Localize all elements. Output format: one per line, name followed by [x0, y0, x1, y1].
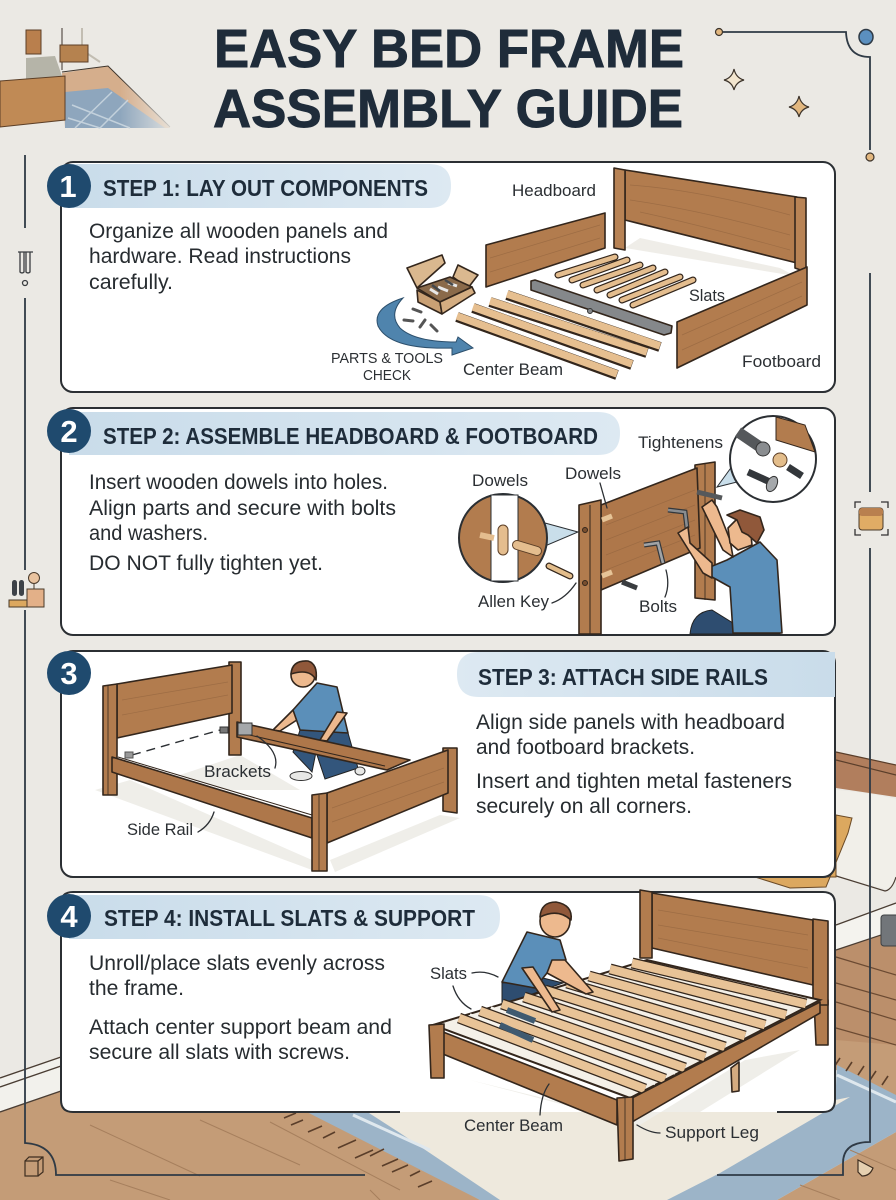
- illustration: bed headboard: [640, 890, 828, 1045]
- text block: step 2 instructions: and washers.: [89, 522, 208, 545]
- panel: step 1: [47, 162, 835, 392]
- icon: bolts and dowel: [549, 492, 722, 588]
- heading: step 1: [47, 164, 451, 208]
- text block: step 3 instructions: securely on all corners.: [476, 795, 692, 818]
- text block: step 2 instructions: DO NOT fully tighten yet.: [89, 552, 323, 575]
- labels: step 3: Side Rail: [127, 820, 193, 839]
- labels: step 1: [331, 181, 821, 384]
- heading: step 3: STEP 3: ATTACH SIDE RAILS: [478, 664, 768, 690]
- heading: step 4: STEP 4: INSTALL SLATS & SUPPORT: [104, 905, 475, 931]
- heading: step 2: 2: [60, 414, 78, 449]
- icon: left shelf: [9, 572, 44, 607]
- text block: step 1 instructions: [89, 220, 388, 294]
- illustration: floor shadow: [95, 755, 460, 872]
- heading: step 4: [47, 894, 500, 939]
- illustration: far rail with bracket: [237, 722, 410, 770]
- illustration: center beam: [531, 280, 672, 335]
- text block: step 1 instructions: hardware. Read instructions: [89, 245, 351, 268]
- icon: bottom-left cube: [25, 1157, 43, 1176]
- heading: step 4: 4: [60, 899, 78, 934]
- illustration: man with rail: [273, 661, 365, 780]
- illustration: under-bed shadow and center leg: [470, 1050, 800, 1125]
- illustration: side board: [486, 213, 605, 287]
- heading: step 1: STEP 1: LAY OUT COMPONENTS: [103, 175, 428, 201]
- icon: small parts: [404, 309, 437, 331]
- text block: step 3 instructions: and footboard brackets.: [476, 736, 695, 759]
- labels: step 2: Tightenens: [638, 433, 723, 452]
- text block: step 1 instructions: carefully.: [89, 271, 173, 294]
- illustration: man placing slats: [502, 902, 571, 1005]
- illustration: man hands on slats: [522, 960, 593, 1012]
- labels: step 4: Center Beam: [464, 1116, 563, 1135]
- text block: step 2 instructions: [89, 471, 396, 575]
- text block: step 2 instructions: Align parts and secure with bolts: [89, 497, 396, 520]
- title: ASSEMBLY GUIDE: [213, 79, 683, 139]
- illustration: parts box: [407, 255, 478, 314]
- top-left room vignette: [0, 20, 180, 130]
- illustration: slat platform: [433, 960, 820, 1098]
- callout: hardware detail: [717, 416, 816, 502]
- panel: step 2: [47, 408, 835, 635]
- labels: step 2: Allen Key: [478, 592, 549, 611]
- labels: step 1: Headboard: [512, 181, 596, 200]
- icon: top right ornaments: [716, 28, 874, 161]
- icon: allen keys: [644, 510, 687, 563]
- labels: step 2: Dowels: [565, 464, 621, 483]
- illustration: headboard: [614, 168, 806, 276]
- heading: step 1: 1: [59, 169, 77, 204]
- labels: step 4: [430, 964, 759, 1142]
- labels: step 3: Brackets: [204, 762, 271, 781]
- labels: step 1: Center Beam: [463, 360, 563, 379]
- illustration: footboard: [312, 748, 457, 871]
- labels: step 1: PARTS & TOOLS: [331, 350, 443, 367]
- icon: bottom-right shape: [858, 1160, 873, 1176]
- illustration: footboard: [677, 267, 807, 368]
- icon: left hardware: [18, 252, 33, 286]
- illustration: short slats: [558, 257, 693, 305]
- labels: step 2: Dowels: [472, 471, 528, 490]
- illustration: side rail dashed guide: [125, 727, 228, 758]
- heading: step 2: STEP 2: ASSEMBLE HEADBOARD & FOOTBOARD: [103, 423, 598, 449]
- labels: step 4: Slats: [430, 964, 467, 983]
- labels: step 1: Slats: [689, 286, 725, 305]
- labels: step 2: [472, 433, 723, 616]
- icon: right face box: [855, 502, 888, 535]
- text block: step 4 instructions: the frame.: [89, 977, 184, 1000]
- panel: step 3: [47, 651, 835, 877]
- panel: step 4: [47, 890, 835, 1161]
- heading: step 3: 3: [60, 656, 78, 691]
- text block: step 4 instructions: [89, 952, 392, 1064]
- text block: step 3 instructions: [476, 711, 792, 818]
- arrow: parts and tools check: [377, 298, 473, 355]
- title: EASY BED FRAME: [214, 19, 684, 79]
- illustration: long slats: [457, 294, 660, 375]
- text block: step 2 instructions: Insert wooden dowels into holes.: [89, 471, 388, 494]
- heading: step 2: [47, 409, 620, 455]
- heading: step 3: [47, 651, 835, 697]
- callout: dowel detail: [459, 494, 578, 582]
- labels: step 4: Support Leg: [665, 1123, 759, 1142]
- text block: step 4 instructions: Attach center support beam and: [89, 1016, 392, 1039]
- title: [213, 19, 684, 139]
- labels: step 1: Footboard: [742, 352, 821, 371]
- text block: step 4 instructions: Unroll/place slats evenly across: [89, 952, 385, 975]
- illustration: front leg and left leg: [429, 1024, 633, 1161]
- illustration: headboard: [103, 662, 241, 795]
- labels: step 3: [127, 736, 276, 839]
- illustration: headboard assembly: [579, 462, 715, 634]
- background room scene: floor, rug and bed: [0, 752, 896, 1200]
- labels: step 1: CHECK: [363, 367, 411, 384]
- text block: step 3 instructions: Insert and tighten metal fasteners: [476, 770, 792, 793]
- illustration: near side rail: [112, 757, 312, 838]
- illustration: side rail: [438, 1002, 820, 1125]
- text block: step 4 instructions: secure all slats with screws.: [89, 1041, 350, 1064]
- labels: step 2: Bolts: [639, 597, 677, 616]
- illustration: man tightening: [678, 500, 782, 634]
- text block: step 3 instructions: Align side panels with headboard: [476, 711, 785, 734]
- text block: step 1 instructions: Organize all wooden panels and: [89, 220, 388, 243]
